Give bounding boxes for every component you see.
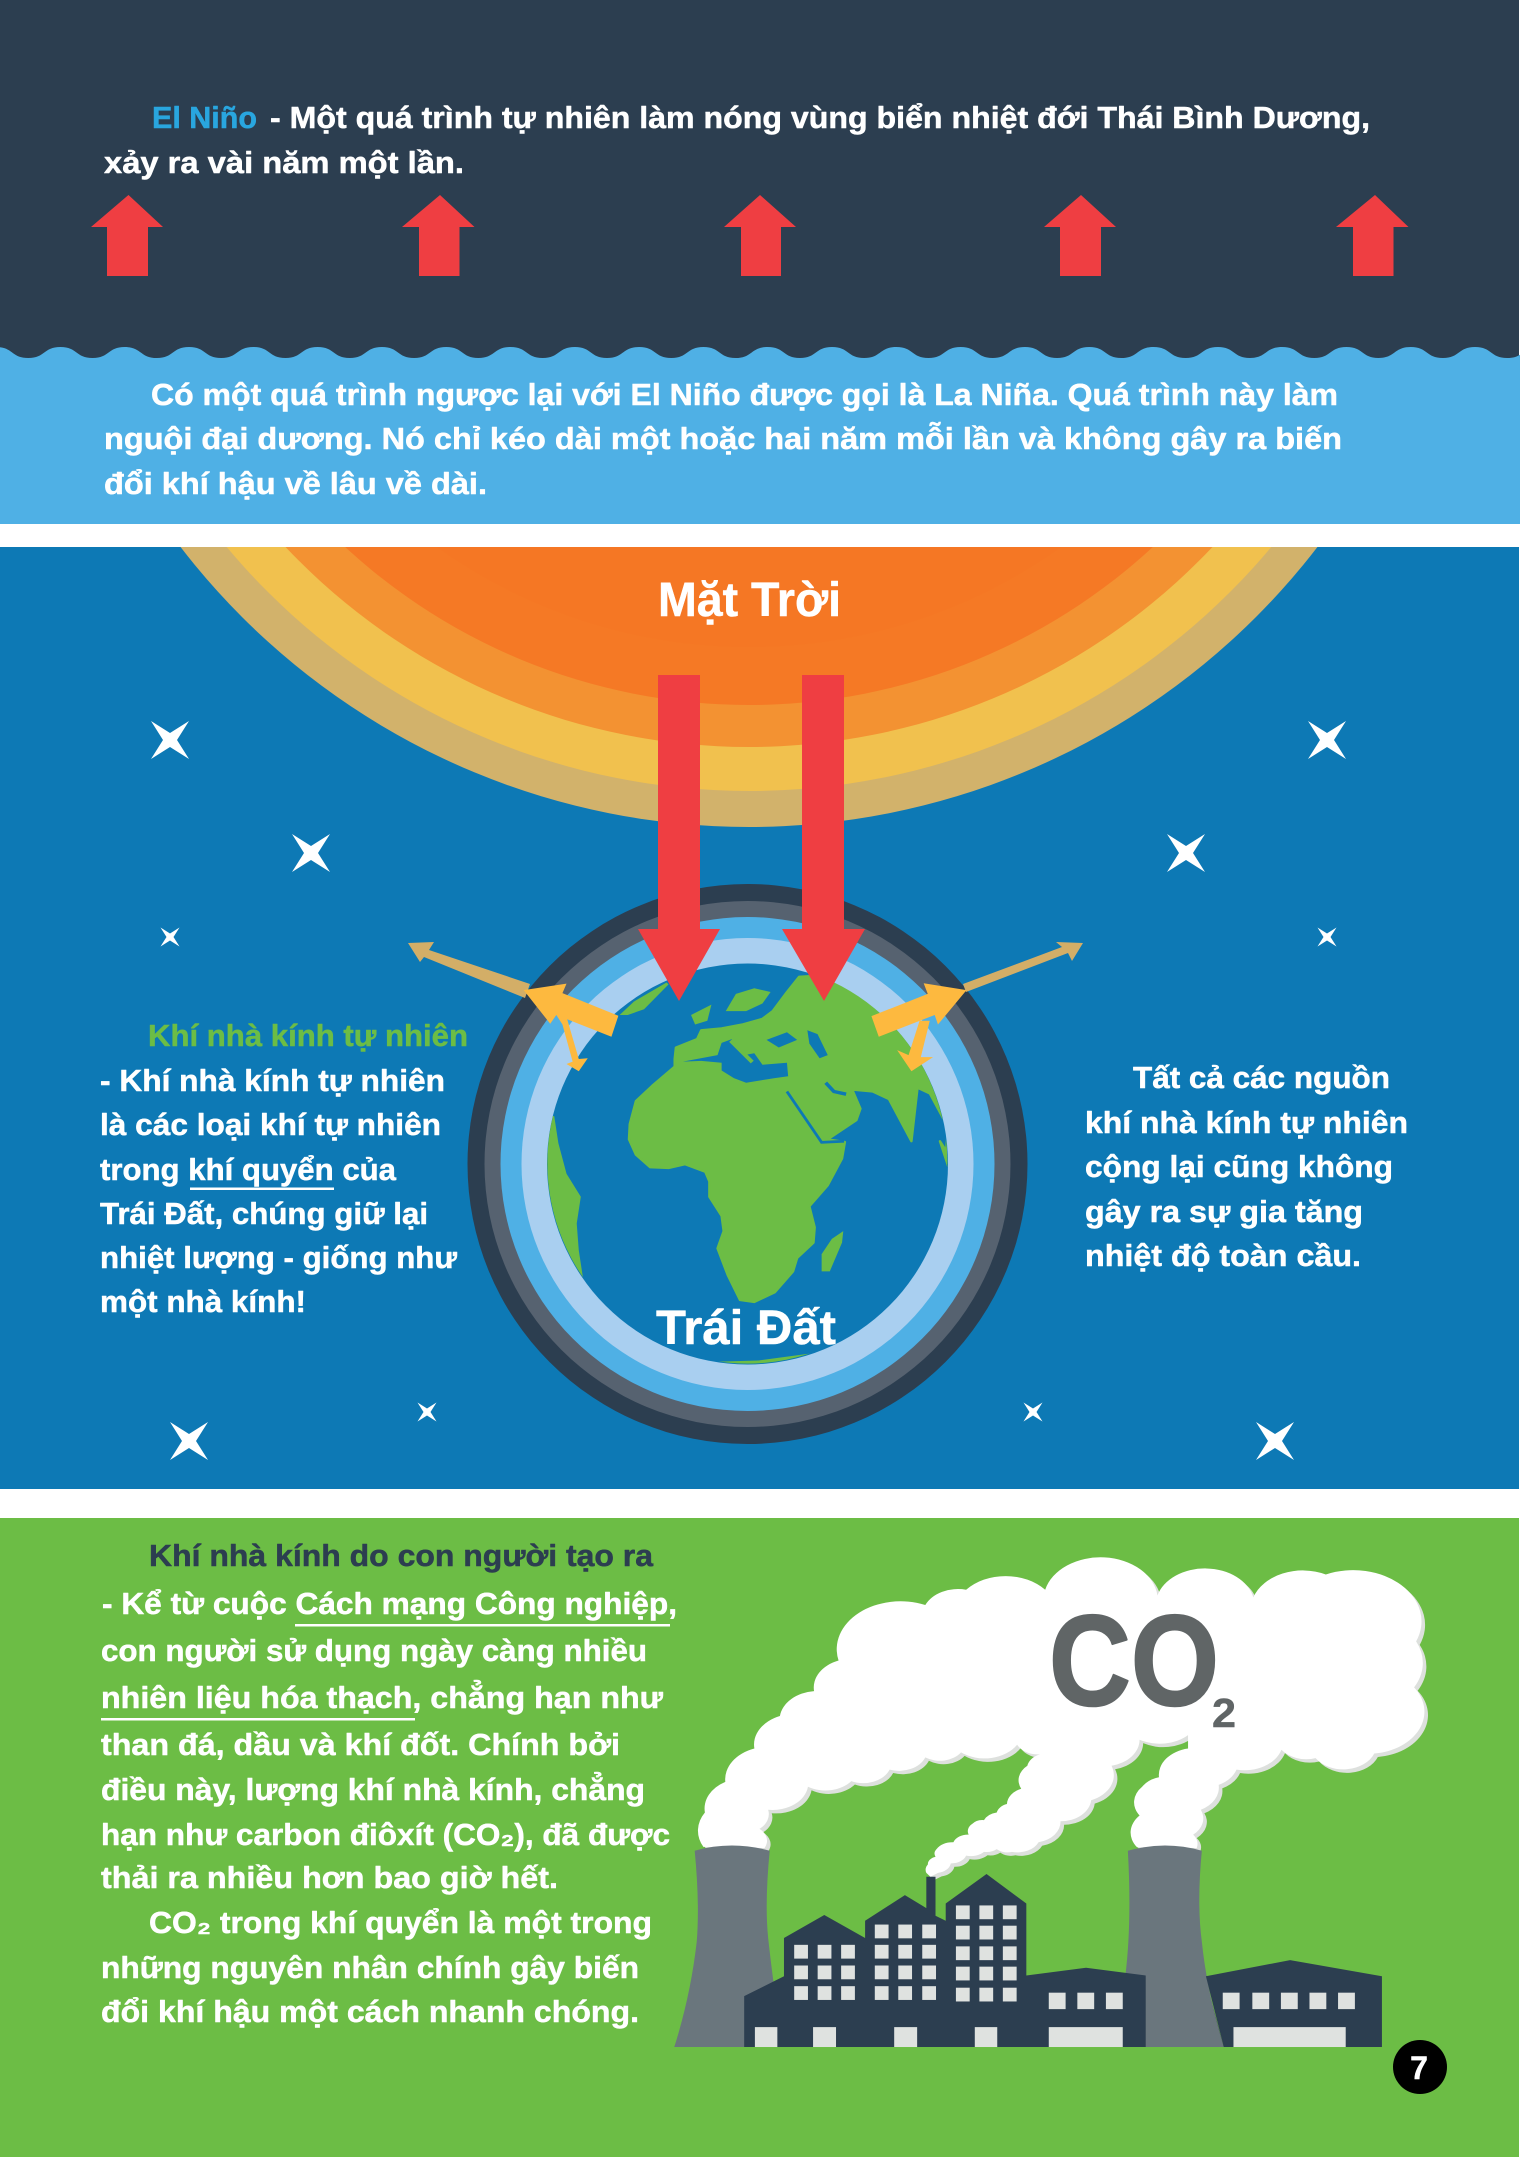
text: La Niña description: đổi khí hậu về lâu về dài. <box>104 466 487 501</box>
arrow: trapped heat right <box>871 983 967 1071</box>
arrow: reflected heat left <box>408 942 530 998</box>
text: natural greenhouse gases: - Khí nhà kính tự nhiên <box>100 1063 445 1098</box>
text: El Niño description: - Một quá trình tự nhiên làm nóng vùng biển nhiệt đới Thái Bình Dương, <box>270 100 1370 135</box>
illustration: factory with smoke <box>674 1557 1428 2047</box>
text: human-made gases: đổi khí hậu một cách nhanh chóng. <box>101 1994 639 2029</box>
icon: smoke cloud <box>698 1557 1428 1880</box>
text: natural greenhouse gases: trong khí quyển của <box>100 1152 397 1187</box>
text: La Niña description: nguội đại dương. Nó chỉ kéo dài một hoặc hai năm mỗi lần và không gây ra biến <box>104 421 1342 456</box>
icon: Earth land masses <box>538 975 971 1373</box>
text: all natural sources: khí nhà kính tự nhiên <box>1085 1105 1408 1140</box>
icon: left cooling tower <box>674 1846 782 2047</box>
text: La Niña description: Có một quá trình ngược lại với El Niño được gọi là La Niña. Quá trình này làm <box>151 377 1338 412</box>
text: natural greenhouse gases: một nhà kính! <box>100 1284 306 1319</box>
text: La Niña description <box>104 377 1342 501</box>
text: El Niño description: xảy ra vài năm một lần. <box>104 145 464 180</box>
text: all natural sources: cộng lại cũng không <box>1085 1149 1393 1184</box>
text: human-made gases: thải ra nhiều hơn bao giờ hết. <box>101 1860 558 1895</box>
text: human-made gases: CO₂ trong khí quyển là một trong <box>149 1905 652 1940</box>
label: CO2: CO <box>1049 1589 1219 1733</box>
icon: factory buildings left <box>744 1874 1146 2047</box>
icon: sun <box>180 547 1318 827</box>
text: all natural sources: Tất cả các nguồn <box>1133 1060 1390 1095</box>
text: human-made gases: những nguyên nhân chính gây biến <box>101 1950 639 1985</box>
text: human-made gases: than đá, dầu và khí đốt. Chính bởi <box>101 1727 620 1762</box>
label: Mặt Trời: Mặt Trời <box>658 574 841 627</box>
text: El Niño description <box>104 100 1370 180</box>
text: natural greenhouse gases <box>100 1018 468 1319</box>
text: natural greenhouse gases: là các loại khí tự nhiên <box>100 1107 441 1142</box>
label: Trái Đất: Trái Đất <box>656 1302 836 1355</box>
text: natural greenhouse gases: Trái Đất, chúng giữ lại <box>100 1196 428 1231</box>
icon: factory building right <box>1206 1960 1382 2047</box>
text: human-made gases: điều này, lượng khí nhà kính, chẳng <box>101 1771 645 1807</box>
label: CO2: 2 <box>1212 1690 1236 1736</box>
text: natural greenhouse gases: nhiệt lượng - giống như <box>100 1240 458 1275</box>
panel: human-made greenhouse gases <box>0 1518 1519 2157</box>
icon: stars <box>151 721 1346 1460</box>
icon: right cooling tower <box>1125 1846 1224 2047</box>
arrow: sunlight right <box>782 675 865 1001</box>
text: human-made gases <box>101 1538 677 2029</box>
panel: La Niña <box>0 347 1520 524</box>
arrow: sunlight left <box>638 675 720 1001</box>
text: human-made gases: nhiên liệu hóa thạch, chẳng hạn như <box>101 1679 664 1715</box>
page number: 7 <box>1410 2050 1428 2086</box>
panel: greenhouse space scene <box>0 547 1519 1489</box>
text: human-made gases: con người sử dụng ngày càng nhiều <box>101 1633 647 1668</box>
icon: atmosphere rings <box>468 884 1028 1444</box>
text: human-made gases: - Kể từ cuộc Cách mạng Công nghiệp, <box>102 1586 677 1621</box>
arrow: reflected heat right <box>963 942 1083 992</box>
page number <box>1393 2040 1447 2094</box>
icon: rising heat arrows <box>91 195 1408 276</box>
heading: Khí nhà kính do con người tạo ra: Khí nhà kính do con người tạo ra <box>149 1538 654 1573</box>
text: all natural sources <box>1085 1060 1408 1273</box>
arrow: trapped heat left <box>524 984 618 1071</box>
panel: El Niño <box>0 0 1519 360</box>
heading: Khí nhà kính tự nhiên: Khí nhà kính tự nhiên <box>148 1018 468 1053</box>
text: human-made gases: hạn như carbon điôxít (CO₂), đã được <box>101 1817 670 1852</box>
text: all natural sources: gây ra sự gia tăng <box>1085 1194 1363 1229</box>
text: all natural sources: nhiệt độ toàn cầu. <box>1085 1238 1361 1273</box>
text: El Niño description: El Niño <box>152 100 257 135</box>
